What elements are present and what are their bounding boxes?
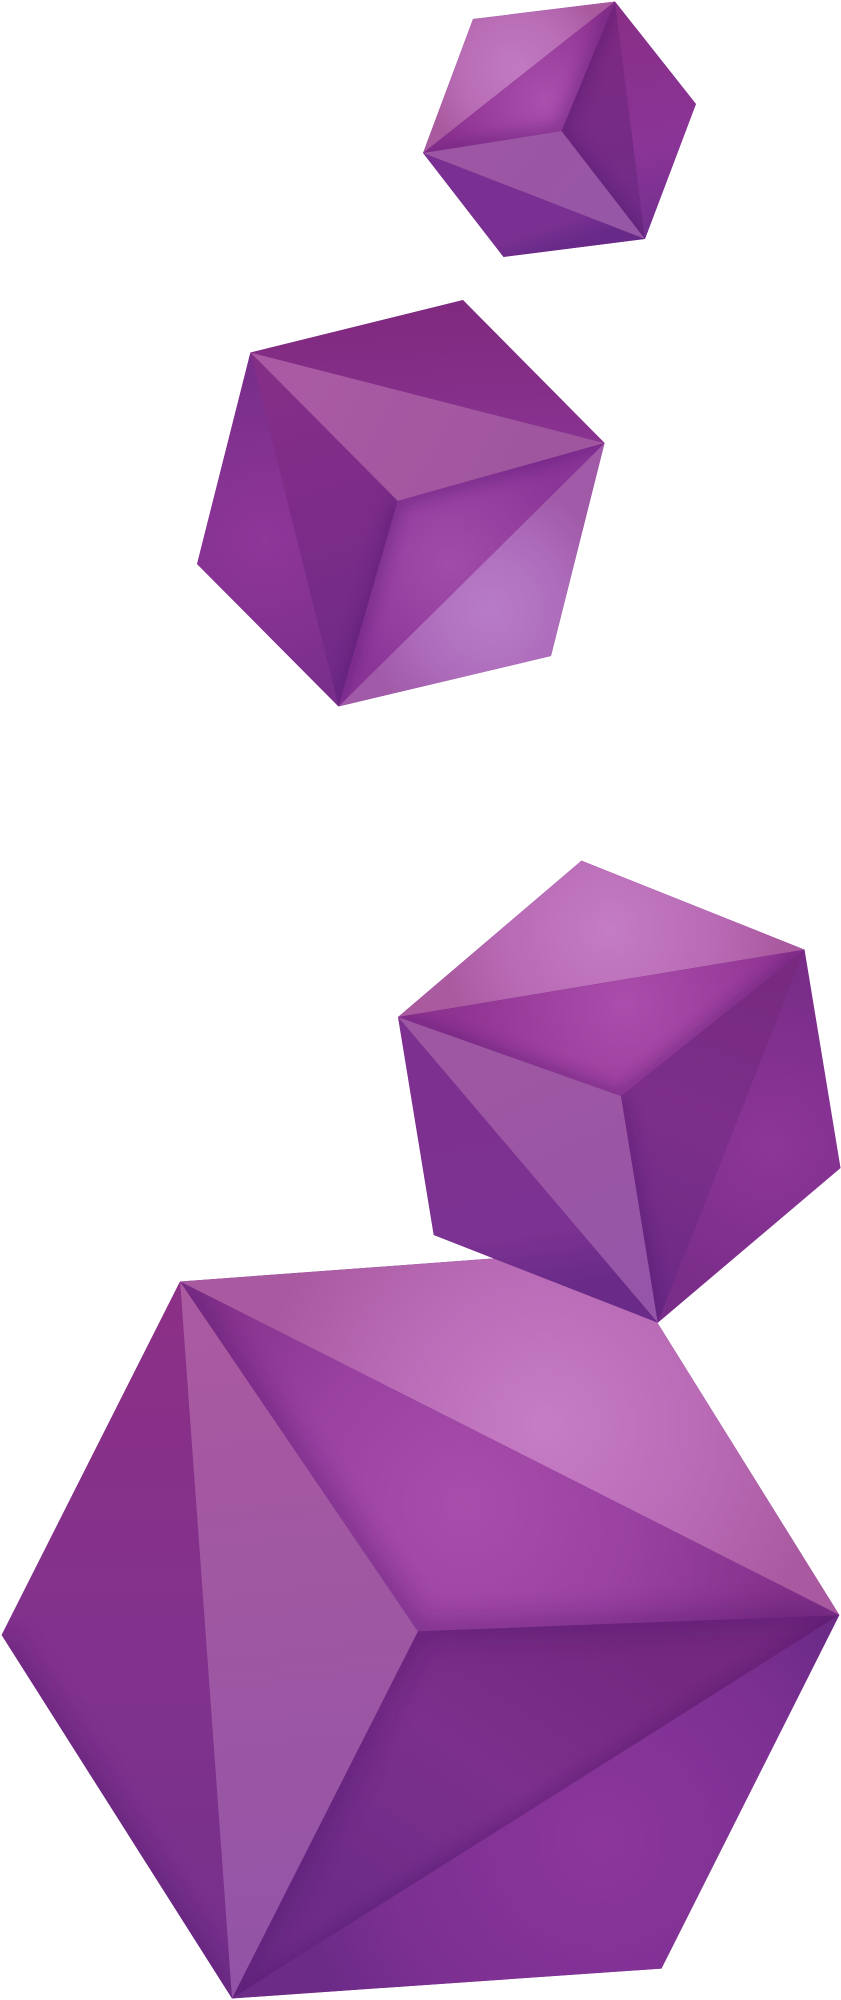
face: dark lower inner: [232, 1615, 839, 1998]
face: bright middle: [423, 2, 615, 153]
face: pale middle: [250, 352, 605, 501]
face: light top: [398, 861, 804, 1017]
face: light top: [180, 1250, 839, 1615]
face: dark inner right: [562, 2, 645, 239]
face: dark top: [250, 300, 605, 443]
gem: large bottom crystal: [2, 1250, 839, 1998]
gem: top small crystal: [423, 2, 696, 257]
face: bottom: [423, 153, 645, 257]
face: bright middle: [398, 950, 804, 1096]
face: light upper left: [423, 2, 615, 153]
face: pale inner: [398, 1017, 658, 1323]
face: pale lower: [423, 131, 645, 239]
face: light lower right: [338, 443, 605, 706]
face: dark inner right: [621, 950, 804, 1323]
face: far left: [2, 1282, 232, 1998]
gem: second crystal: [197, 300, 605, 706]
face: far left: [197, 352, 338, 706]
face: pale left inner: [180, 1282, 418, 1998]
face: far right: [615, 2, 696, 239]
gem: third crystal: [398, 861, 840, 1323]
face: bottom right: [232, 1615, 839, 1998]
face: bright middle: [180, 1282, 839, 1631]
face: far right: [658, 950, 840, 1323]
face: bright inner right: [353, 458, 590, 692]
face: dark inner left: [250, 352, 398, 706]
face: lower left: [398, 1017, 658, 1323]
